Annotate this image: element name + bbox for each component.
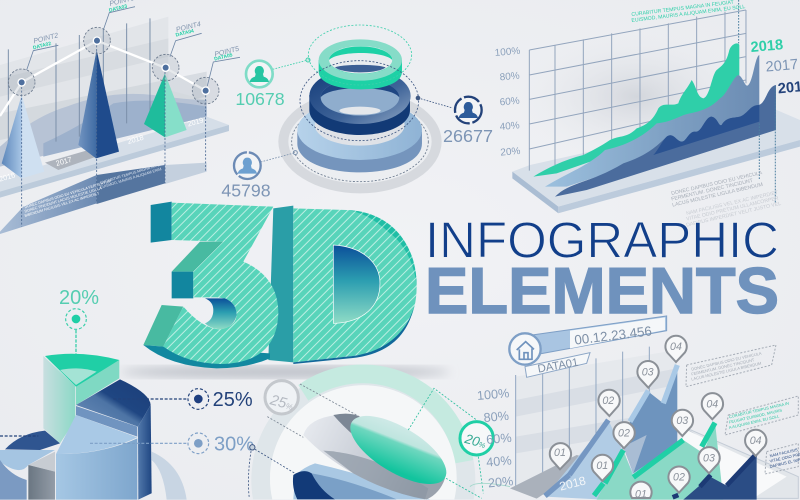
node — [250, 445, 255, 450]
wall shading — [517, 30, 757, 163]
axis labels — [476, 386, 514, 490]
panel: bottom-right mountain chart — [470, 316, 800, 500]
pin labels: 04 — [670, 341, 682, 353]
axis labels: 20% — [500, 146, 521, 159]
value: 10678: 10678 — [235, 89, 285, 109]
letter 3 — [143, 202, 278, 368]
callout: 30%: 30% — [214, 433, 254, 455]
axis labels: 80% — [499, 71, 520, 83]
badge: 20%: 20% — [462, 431, 488, 451]
series 2018 — [533, 43, 739, 177]
pin 01 teal — [592, 455, 613, 481]
faint caption: NAM FACILISIS VEL EX AC IMPERDIET — [686, 190, 780, 217]
point labels — [27, 0, 240, 86]
faint caption: DAPIBUS IMPERDIET VELIT JUSTO VEL — [686, 201, 782, 229]
series 2017 — [545, 55, 759, 187]
connector lines — [261, 60, 453, 162]
dashed guide lines — [248, 384, 483, 498]
callout: teal note: FEUGIAT EUISMOD, MAURIS — [728, 407, 783, 425]
panel: top-left pyramid line chart — [0, 0, 240, 234]
point labels: POINT2 — [33, 32, 59, 45]
callout: navy note: DAPIBUS EL IMP — [769, 457, 800, 469]
pin 04 navy — [745, 430, 766, 456]
letter D — [293, 208, 417, 364]
pin labels: 01 — [635, 488, 647, 500]
pyramid: dark blue — [78, 50, 119, 158]
pin labels: 03 — [676, 415, 688, 427]
sphere dark crescent — [333, 414, 387, 460]
callout: 25%: 25% — [213, 389, 253, 411]
pin labels: 03 — [642, 367, 654, 379]
pie base disk — [152, 452, 187, 500]
pyramid: teal — [144, 73, 187, 137]
point labels: POINT5 — [214, 46, 240, 59]
small left slices — [0, 431, 60, 500]
axis labels: 40% — [486, 453, 512, 470]
25% slice — [76, 379, 152, 500]
axis labels — [494, 46, 521, 159]
gray caption: LACUS MOLESTIE LIGULA BIBENDUM — [672, 182, 764, 209]
pins — [550, 336, 766, 498]
connector nodes — [293, 58, 420, 155]
callout: 25% — [113, 389, 253, 411]
callout line: left slice — [0, 434, 38, 438]
text ribbon below chart: DONEC DAPIBUS ODIO EU VEHICULA FERMENTUM — [24, 179, 112, 209]
panel: stacked rings — [221, 25, 493, 201]
year label 2018: 2018 — [558, 473, 588, 494]
green caption: EUISMOD, MAURIS A ALIQUAM ENIM, EU SOLL — [631, 4, 746, 24]
point labels: DATA04 — [175, 28, 195, 39]
callout: navy note: NAM FACILISIS — [769, 447, 798, 458]
orbit ring — [251, 364, 475, 499]
pin 04 blue — [665, 336, 687, 362]
axis labels: 40% — [499, 120, 520, 133]
pin 01 blue — [550, 443, 571, 469]
year labels: 2017 — [765, 57, 799, 76]
text ribbon below chart: EUISMOD, MAURIS A ALIQUAM ENIM — [100, 167, 162, 190]
point labels: DATA03 — [108, 4, 128, 14]
pin labels: 04 — [750, 435, 762, 447]
badge: 20% — [460, 422, 493, 455]
pin labels: 02 — [602, 395, 614, 407]
icon: person navy — [455, 97, 482, 123]
letter D stem — [268, 206, 293, 362]
pin labels: 04 — [706, 398, 718, 410]
year labels — [750, 37, 800, 97]
text ribbon below chart: CURABITUR TEMPUS MAGNA IN FEUGIAT — [100, 160, 171, 185]
callout: teal note: CURABITUR TEMPUS MAGNA IN — [728, 401, 790, 419]
navy ring — [309, 63, 411, 135]
callout: gray note: FERMENTUM. DONEC TINCIDUNT — [691, 357, 755, 377]
pin 04 teal — [702, 393, 723, 419]
callout: teal note — [725, 396, 798, 435]
pin 02 blue — [598, 390, 620, 416]
wall bands and grid — [516, 347, 677, 488]
data line with points — [0, 27, 219, 116]
chart back wall — [0, 17, 207, 167]
faint caption: VITAE ODIO PRETIUM ULLAMCORPER — [686, 195, 779, 223]
floor platform — [470, 427, 798, 499]
timer pill: 00.12.23.456 — [574, 323, 653, 348]
chart floor slab — [0, 115, 229, 198]
icon: person blue — [234, 152, 261, 179]
point labels: DATA05 — [214, 52, 233, 63]
callout: gray note — [686, 345, 776, 387]
sphere teal cap — [340, 403, 457, 497]
callout: navy note — [765, 443, 800, 474]
icon: home — [509, 333, 541, 365]
tag: DATA01 — [525, 353, 590, 377]
badge: 25% — [265, 381, 298, 414]
gray caption — [671, 170, 764, 209]
point labels: POINT4 — [175, 21, 202, 34]
grid — [529, 10, 746, 171]
drop lines — [22, 42, 206, 227]
panel: 3D pie chart — [0, 287, 254, 500]
title: 3D letters — [143, 202, 417, 368]
pin labels — [554, 341, 762, 500]
pin 01 navy — [630, 482, 652, 498]
slab — [512, 110, 800, 213]
pin 03 navy — [698, 447, 720, 473]
text ribbon below chart: BIBENDUM FACILISIS VEL EX AC IMPERDIET — [24, 191, 101, 218]
series 2016 — [555, 85, 776, 197]
pin labels: 02 — [673, 472, 685, 484]
pyramid: light blue — [2, 95, 44, 178]
20% slice — [43, 354, 119, 443]
pin 03 teal — [672, 410, 693, 436]
callout: 30% — [90, 433, 254, 455]
icon: person teal — [246, 61, 273, 87]
value: 45798: 45798 — [221, 181, 271, 201]
axis labels: 20% — [487, 474, 514, 490]
badge: 25%: 25% — [267, 392, 295, 414]
panel: top-right area chart — [494, 0, 800, 229]
point labels: DATA02 — [32, 41, 52, 51]
chart floor slab: 2018 — [126, 133, 145, 146]
axis labels: 60% — [499, 96, 520, 108]
axis labels: 80% — [483, 409, 510, 425]
chart floor slab: 2017 — [55, 155, 73, 168]
text ribbon below chart — [0, 160, 207, 234]
pin labels: 01 — [596, 460, 608, 472]
sphere lower segments — [293, 463, 430, 499]
tag: DATA01: DATA01 — [537, 357, 579, 376]
timer pill — [525, 316, 667, 357]
pin 02 navy — [668, 466, 690, 493]
shadow beneath 3D letters — [120, 366, 450, 378]
callout: gray note: DONEC DAPIBUS ODIO EU VEHICULA — [691, 351, 762, 372]
chart floor slab: 2019 — [186, 115, 205, 129]
blue mountain series — [545, 365, 677, 500]
navy mountain series — [673, 455, 757, 500]
base disk — [278, 90, 442, 193]
callout: 20% — [59, 287, 99, 354]
axis labels: 100% — [494, 46, 521, 59]
drop lines — [739, 0, 775, 203]
pin labels: 02 — [618, 427, 630, 439]
callout: 20%: 20% — [59, 287, 99, 309]
text ribbon below chart: DONEC TINCIDUNT LACUS MOLESTIE LIGULA — [24, 186, 103, 214]
pin labels: 01 — [554, 447, 566, 459]
light blue ring — [297, 100, 422, 172]
title: INFOGRAPHIC: INFOGRAPHIC — [425, 212, 779, 268]
callout: gray note: LACUS MOLESTIE LIGULA BIBENDUM — [691, 361, 762, 382]
pin labels: 03 — [703, 452, 715, 464]
value: 26677: 26677 — [443, 126, 493, 146]
gray caption: FERMENTUM. DONEC TINCIDUNT — [671, 178, 754, 203]
green caption: CURABITUR TEMPUS MAGNA IN FEUGIAT — [631, 0, 735, 18]
pin 03 blue — [637, 361, 659, 388]
30% slice — [56, 415, 137, 500]
axis labels: 100% — [476, 386, 510, 403]
sphere middle gray segment — [303, 415, 445, 499]
title: ELEMENTS: ELEMENTS — [425, 254, 779, 327]
panel: exploded sphere — [248, 364, 493, 499]
dashed orbits — [300, 25, 419, 141]
teal mountain series — [594, 422, 723, 500]
gray caption: DONEC DAPIBUS ODIO EU VEHICULA — [671, 170, 763, 197]
year labels: 2018 — [750, 37, 784, 56]
teal ring — [319, 39, 402, 89]
axis labels: 60% — [486, 431, 512, 447]
pin 02 teal — [613, 422, 635, 448]
callout: teal note: A ALIQUAM ENIM, EU SOLL — [728, 413, 780, 430]
